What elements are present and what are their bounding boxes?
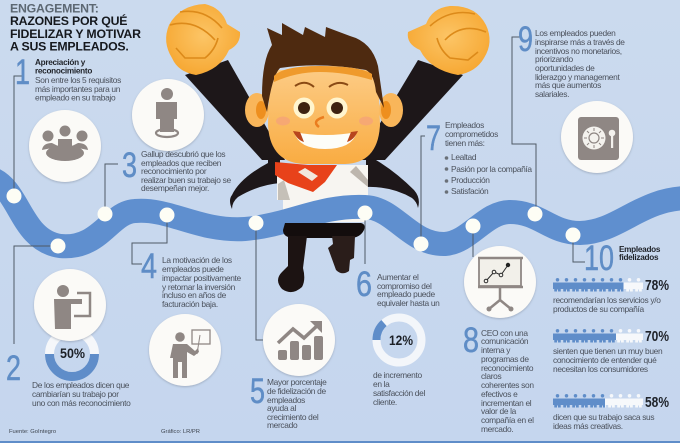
- title: FIDELIZAR Y MOTIVAR: [10, 27, 141, 41]
- item 7: [426, 119, 532, 196]
- stat: 78%: productos de su compañía: [553, 304, 644, 314]
- item 1: 1: [15, 53, 30, 92]
- stat: 58%: ideas más creativas.: [553, 421, 623, 431]
- item 6: empleado puede: [377, 289, 435, 299]
- item 4: [141, 247, 242, 309]
- item 10 heading: fidelizados: [619, 253, 659, 262]
- item 8: 8: [463, 321, 479, 360]
- character: right fist: [408, 6, 490, 75]
- item 8: coherentes son: [481, 380, 534, 390]
- stat: 70%: conocimiento de entender qué: [553, 355, 657, 365]
- item 8: comunicación: [481, 336, 529, 346]
- item 3: [122, 146, 231, 193]
- item 9: priorizando: [535, 54, 573, 64]
- item 1: reconocimiento: [35, 66, 92, 76]
- item 8: [463, 321, 534, 434]
- character: left fist: [166, 4, 240, 75]
- stat: 58%: [553, 394, 669, 431]
- item 6 continuation: en la: [373, 379, 390, 389]
- icon: person on target: [132, 79, 204, 151]
- item 8: incrementan el: [481, 398, 532, 408]
- item 2: ring 50%: 50%: [60, 345, 85, 361]
- character: head: [245, 23, 403, 164]
- item 1: Son entre los 5 requisitos: [35, 75, 121, 85]
- stat: 78%: [553, 277, 669, 314]
- item 6 continuation: de incremento: [373, 370, 422, 380]
- item 5: empleados: [267, 395, 305, 405]
- item 3: empleados que reciben: [141, 158, 222, 168]
- title: RAZONES POR QUÉ: [10, 13, 127, 28]
- item 6 continuation: satisfacción del: [373, 388, 425, 398]
- source credit: Fuente: GoIntegro: [9, 429, 56, 435]
- item 2 text: De los empleados dicen que: [32, 380, 130, 390]
- item 5: de fidelización de: [267, 386, 326, 396]
- connector lines: [14, 37, 585, 344]
- item 9: salariales.: [535, 89, 569, 99]
- item 5: Mayor porcentaje: [267, 377, 327, 387]
- item 6: 6: [356, 265, 372, 304]
- item 1: empleado en su trabajo: [35, 92, 116, 102]
- stat: 70%: sienten que tienen un muy buen: [553, 346, 663, 356]
- item 4: 4: [141, 247, 157, 286]
- ribbon: [0, 178, 680, 246]
- stat: 70%: necesitan los consumidores: [553, 364, 648, 374]
- item 2: ring 50%: [50, 332, 94, 376]
- icon: safe: [561, 101, 633, 173]
- graphic credit: Gráfico: LR/PR: [161, 429, 200, 435]
- item 9: 9: [518, 20, 533, 59]
- item 6 continuation: [373, 370, 425, 407]
- item 6: equivaler hasta un: [377, 298, 440, 308]
- item 4: incluso en años de: [162, 290, 227, 300]
- item 8: claros: [481, 371, 502, 381]
- item 9: oportunidades de: [535, 63, 595, 73]
- item 2 text: uno con más reconocimiento: [32, 398, 131, 408]
- item 1: más importantes para un: [35, 84, 121, 94]
- character: legs: [278, 223, 365, 292]
- item 5: mercado: [267, 420, 298, 430]
- item 4: facturación baja.: [162, 299, 218, 309]
- stat: 78%: recomendarían los servicios y/o: [553, 295, 661, 305]
- item 3: desempeñan mejor.: [141, 183, 209, 193]
- icon: growth chart: [263, 304, 335, 376]
- item 8: compañía en el: [481, 415, 534, 425]
- item 10 heading: Empleados: [619, 245, 661, 254]
- item 8: reconocimiento: [481, 363, 534, 373]
- character: scarf: [275, 162, 337, 192]
- item 7: Pasión por la compañía: [451, 164, 532, 174]
- item 9: inspirarse más a través de: [535, 37, 625, 47]
- item 7: Producción: [451, 175, 490, 185]
- icon: person with clipboard: [34, 269, 106, 341]
- item 2 text: 2: [6, 349, 21, 388]
- title: A SUS EMPLEADOS.: [10, 40, 129, 54]
- item 8: mercado.: [481, 424, 513, 434]
- item 1: Apreciación y: [35, 58, 86, 67]
- item 4: y retornar la inversión: [162, 282, 236, 292]
- stat: 70%: [553, 328, 669, 374]
- item 6: Aumentar el: [377, 272, 419, 282]
- item 8: CEO con una: [481, 328, 528, 338]
- item 6 continuation: cliente.: [373, 397, 397, 407]
- item 9: incentivos no monetarios,: [535, 46, 622, 56]
- item 5: [250, 372, 327, 430]
- item 3: reconocimiento por: [141, 166, 207, 176]
- item 4: impactar positivamente: [162, 273, 242, 283]
- ring 12%: 12%: [389, 332, 413, 348]
- item 5: ayuda al: [267, 403, 296, 413]
- icon: presenter: [149, 314, 221, 386]
- item 4: empleados puede: [162, 264, 224, 274]
- title: [10, 2, 141, 54]
- character: arms and cape behind the ribbon: [185, 60, 463, 222]
- item 7: Lealtad: [451, 152, 477, 162]
- icon: presentation board: [464, 246, 536, 318]
- item 5: crecimiento del: [267, 412, 319, 422]
- item 3: 3: [122, 146, 137, 185]
- stat: 78%: 78%: [645, 277, 669, 294]
- item 6: compromiso del: [377, 281, 432, 291]
- item 9: [518, 20, 625, 99]
- item 7: comprometidos: [445, 129, 498, 139]
- item 9: liderazgo y management: [535, 72, 620, 82]
- item 10 heading: [584, 239, 661, 278]
- item 8: programas de: [481, 354, 529, 364]
- icon: meeting table: [29, 110, 101, 182]
- item 6: [356, 265, 440, 308]
- item 7: Empleados: [445, 120, 484, 130]
- stat: 58%: 58%: [645, 394, 669, 411]
- item 1: [15, 53, 121, 102]
- item 4: La motivación de los: [162, 255, 232, 265]
- ring 12%: [376, 318, 422, 362]
- title: ENGAGEMENT:: [10, 2, 99, 16]
- item 8: valor de la: [481, 406, 517, 416]
- item 3: Gallup descubrió que los: [141, 149, 225, 159]
- stat: 70%: 70%: [645, 328, 669, 345]
- item 9: más que aumentos: [535, 80, 601, 90]
- item 7: tienen más:: [445, 138, 485, 148]
- item 8: interna y: [481, 345, 511, 355]
- ribbon dots: [6, 188, 580, 254]
- stat: 58%: dicen que su trabajo saca sus: [553, 412, 654, 422]
- item 7: 7: [426, 119, 441, 158]
- item 5: 5: [250, 372, 265, 411]
- item 2 text: [6, 349, 131, 408]
- item 7: Satisfación: [451, 186, 489, 196]
- item 3: realizar buen su trabajo se: [141, 175, 231, 185]
- item 9: Los empleados pueden: [535, 28, 616, 38]
- item 10 heading: 10: [584, 239, 614, 278]
- item 2 text: cambiarían su trabajo por: [32, 389, 119, 399]
- item 8: efectivos e: [481, 389, 518, 399]
